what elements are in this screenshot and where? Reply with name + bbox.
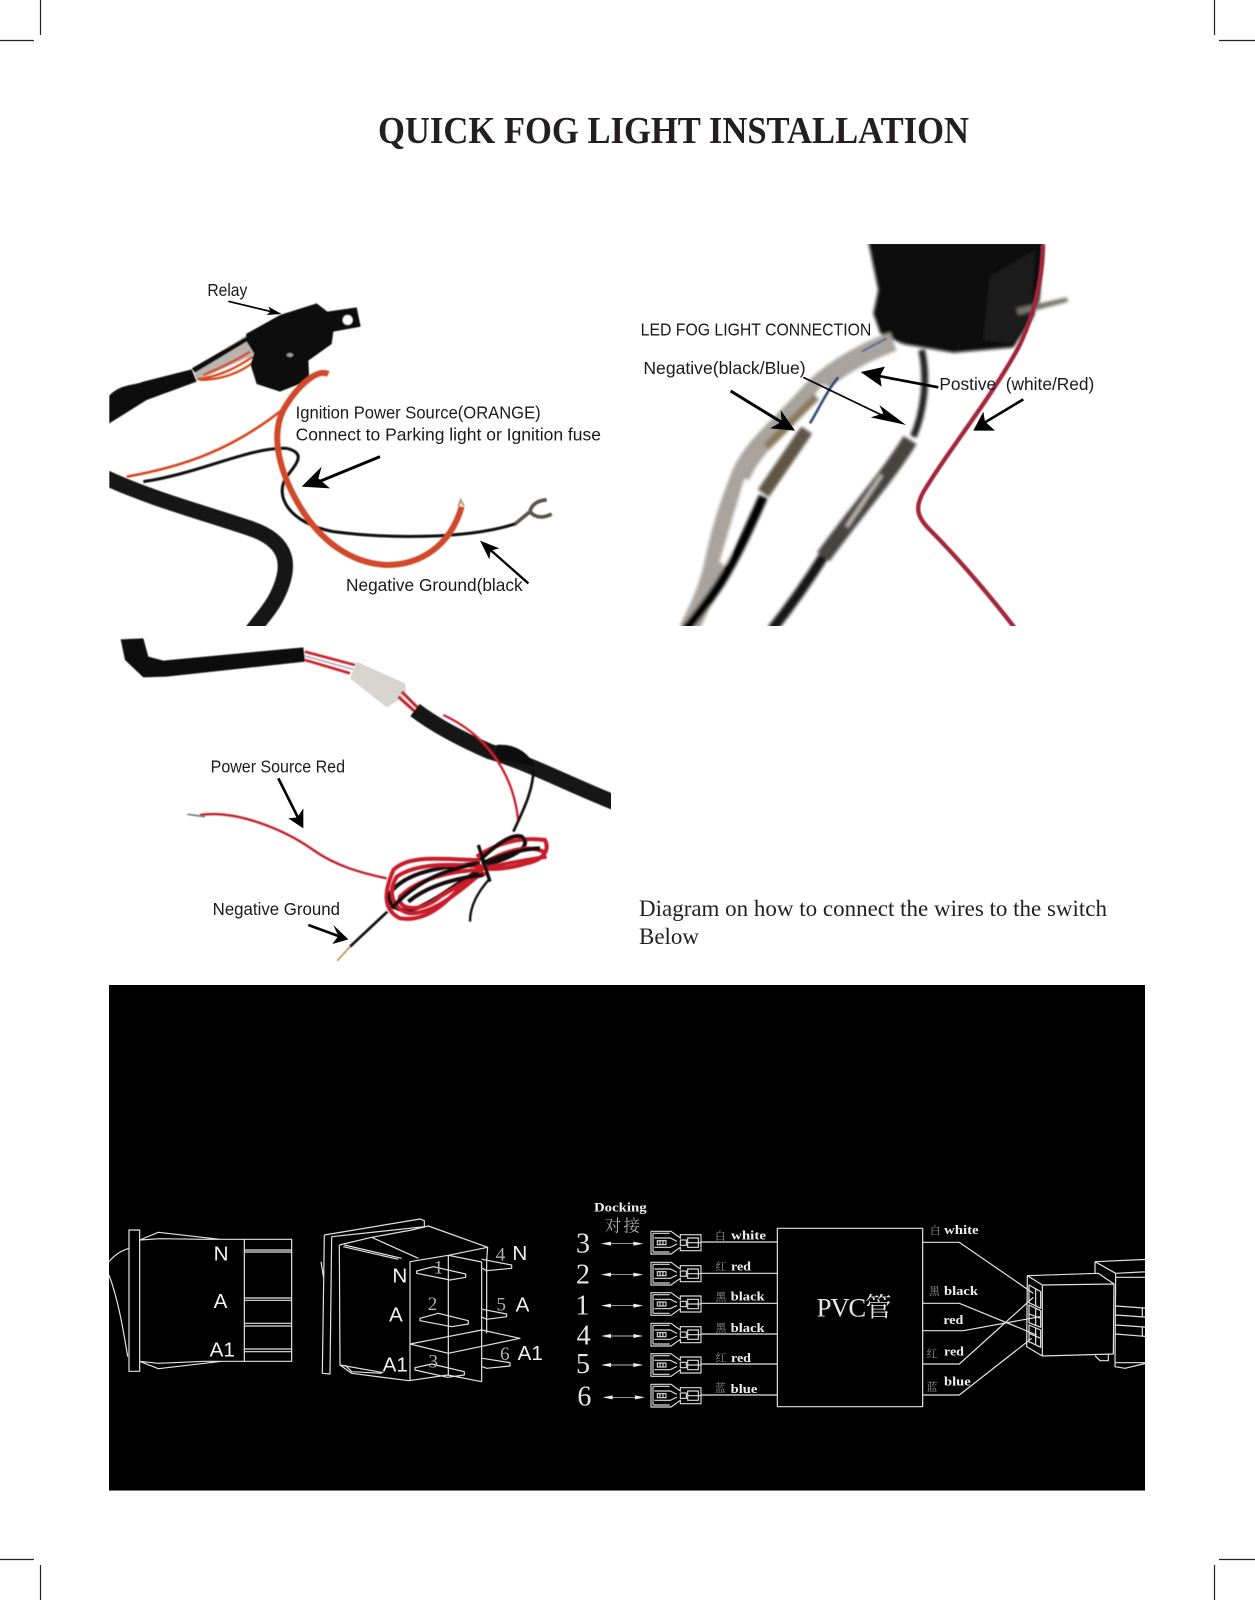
pin order numbers: 2 (576, 1259, 590, 1290)
left wire colour labels: 白 (715, 1229, 726, 1242)
plug housing (1027, 1259, 1148, 1368)
arrow: negative right (803, 377, 906, 425)
terminals (415, 1258, 512, 1377)
left wire colour labels: 红 (716, 1353, 727, 1365)
sleeve (121, 638, 305, 677)
right wire colour labels: 蓝 (927, 1381, 938, 1394)
output wires (923, 1242, 1040, 1395)
PVC label: PVC管 (817, 1293, 892, 1323)
switch side view: A1 (210, 1339, 235, 1362)
free red wire (200, 814, 387, 878)
wires to PVC (701, 1242, 777, 1395)
docking label: Docking (594, 1201, 647, 1215)
left wire colour labels: black (731, 1321, 766, 1335)
right wire colour labels: black (944, 1284, 979, 1298)
switch rear view: N (512, 1242, 527, 1265)
switch rear view: A1 (518, 1342, 543, 1365)
pin letters: N (392, 1265, 407, 1288)
switch rear view: 4 (496, 1245, 506, 1266)
right wire colour labels (927, 1223, 979, 1394)
switch rear view: 3 (428, 1351, 438, 1372)
text block: diagram note: Diagram on how to connect the wires to the switch (639, 896, 1107, 921)
panel: relay wiring photo (103, 280, 601, 632)
thin red (127, 405, 288, 477)
label: negative: Negative(black/Blue) (643, 358, 806, 378)
right wire colour labels: blue (944, 1374, 971, 1388)
label: negative ground: Negative Ground(black (346, 575, 523, 595)
arrow: positive left (861, 367, 938, 387)
black wire (143, 448, 517, 536)
arrow: negative left (731, 391, 795, 431)
label: relay: Relay (207, 280, 248, 300)
switch rear view (321, 1219, 543, 1382)
docking cjk label: 对接 (605, 1216, 640, 1235)
left wire colour labels: black (731, 1290, 766, 1304)
label: LED fog light connection: LED FOG LIGHT CONNECTION (641, 320, 871, 340)
panel: wiring diagram (109, 985, 1145, 1490)
right wire colour labels: 黑 (929, 1286, 940, 1298)
text block: diagram note (639, 896, 1107, 949)
corrugated cable (103, 477, 285, 632)
arrow: power source (278, 778, 303, 828)
switch rear view: A (516, 1294, 530, 1317)
left wire colour labels: 蓝 (715, 1382, 726, 1395)
switch rear view: A1 (383, 1354, 408, 1377)
PVC box (777, 1228, 923, 1407)
spade terminals (651, 1231, 701, 1407)
left wire colour labels: blue (731, 1382, 758, 1396)
relay body (246, 303, 361, 392)
red and black wires (443, 715, 518, 822)
pin order numbers: 5 (576, 1349, 590, 1380)
left wire colour labels: 黑 (716, 1322, 727, 1334)
left wire colour labels: 黑 (716, 1292, 727, 1304)
right wire colour labels: 白 (930, 1224, 941, 1237)
switch rear view: 6 (500, 1344, 510, 1365)
pin order numbers: 6 (577, 1382, 591, 1413)
switch side view: A (214, 1290, 228, 1313)
corrugated cable (415, 710, 617, 803)
right wire colour labels: red (944, 1345, 964, 1359)
pin order numbers: 4 (577, 1320, 591, 1351)
title: QUICK FOG LIGHT INSTALLATION (378, 110, 969, 152)
pin numbers: 1 (434, 1257, 443, 1278)
connector harness diagram (575, 1201, 923, 1413)
text block: diagram note: Below (639, 924, 699, 949)
left wire colour labels: 红 (716, 1262, 727, 1274)
arrow: negative ground (308, 925, 348, 944)
white wire (688, 342, 893, 630)
middle wire (913, 350, 925, 437)
pin labels: N (214, 1243, 229, 1266)
panel: LED fog light connection photo (641, 242, 1094, 630)
docking arrows (601, 1242, 645, 1399)
pin order numbers: 3 (576, 1228, 590, 1259)
switch rear view: A (389, 1304, 403, 1327)
label: ignition power: Ignition Power Source(ORANGE) (296, 402, 541, 422)
right wire colour labels: 红 (927, 1348, 938, 1360)
label: negative ground: Negative Ground (213, 899, 340, 919)
pin order numbers: 1 (575, 1290, 589, 1321)
left wire colour labels (715, 1228, 766, 1396)
panel: power source photo (121, 638, 617, 961)
thick red wire (277, 373, 462, 565)
pin order numbers (575, 1228, 591, 1413)
switch side view (109, 1230, 292, 1371)
white connector (350, 662, 407, 707)
arrow: relay (228, 301, 282, 315)
red wire (918, 245, 1043, 628)
arrow: positive right (973, 399, 1023, 431)
right wire colour labels: white (944, 1223, 979, 1237)
harness sleeve (107, 369, 197, 425)
light housing (868, 242, 1044, 353)
label: power source red: Power Source Red (211, 757, 345, 777)
left wire colour labels: red (731, 1351, 751, 1365)
fork terminal (515, 500, 552, 524)
coil (387, 836, 547, 919)
arrow: ignition (302, 457, 380, 488)
label: positive: Postive (white/Red) (939, 374, 1094, 394)
right wire colour labels: red (943, 1313, 963, 1327)
left wire colour labels: red (731, 1259, 751, 1273)
switch rear view: 5 (496, 1295, 506, 1316)
arrow: ground (480, 541, 528, 583)
black negative wire (763, 430, 807, 493)
connector plug diagram (923, 1223, 1148, 1395)
left wire colour labels: white (731, 1228, 766, 1242)
label: parking light: Connect to Parking light or Ignition fuse (296, 425, 601, 445)
switch rear view: 2 (428, 1294, 437, 1315)
